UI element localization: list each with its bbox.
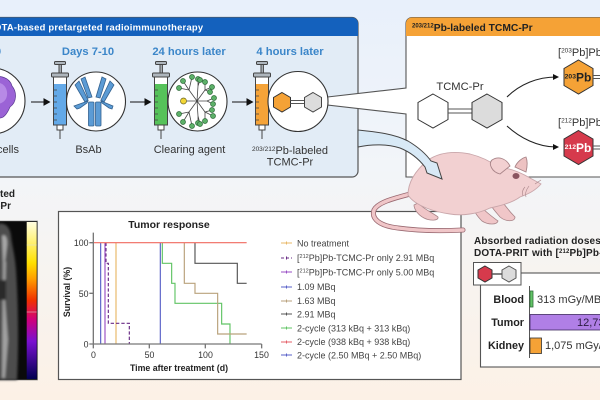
arrow: to lead-203 xyxy=(507,77,556,97)
panel: PET imaging title: ted xyxy=(0,189,15,200)
panel header: workflow title xyxy=(0,18,358,36)
icon: 203Pb hexagon: 203 xyxy=(565,74,576,80)
icon: 203Pb hexagon xyxy=(564,60,600,94)
icon: 203Pb hexagon: Pb xyxy=(576,70,591,84)
step label: days 7-10: Days 7-10 xyxy=(62,46,114,58)
chart legend: 1.63 MBq xyxy=(297,296,336,306)
chart legend: [ xyxy=(297,268,300,278)
chart axes xyxy=(89,233,262,348)
mouse body xyxy=(408,152,541,215)
arrow: step 3 to 4 xyxy=(232,99,252,105)
x axis tick labels: 100 xyxy=(198,350,213,360)
x axis tick labels: 50 xyxy=(145,350,154,360)
x axis tick labels: 0 xyxy=(91,350,96,360)
arrow: step 1 to 2 xyxy=(31,99,50,105)
icon: clearing agent dendrimer circle xyxy=(168,72,227,131)
chart legend: 2-cycle (2.50 MBq + 2.50 MBq) xyxy=(297,350,421,360)
illustration: mouse with injection arrow xyxy=(358,130,541,231)
y axis tick labels: 0 xyxy=(84,340,89,350)
y axis tick labels: 100 xyxy=(74,238,89,248)
y axis tick labels: 50 xyxy=(79,289,89,299)
chart legend: 212 xyxy=(300,268,309,274)
chart legend: 2.91 MBq xyxy=(297,310,336,320)
arrow: step 2 to 3 xyxy=(130,99,150,105)
chart legend: 212 xyxy=(300,254,309,260)
icon: blue syringe xyxy=(52,62,68,139)
step label: 4 hours later: 4 hours later xyxy=(256,46,324,58)
icon: tumor cell circle xyxy=(0,68,25,134)
bar row: tumor: Tumor xyxy=(491,317,525,329)
injection arrow xyxy=(358,130,442,179)
chart legend: Pb]Pb-TCMC-Pr only 5.00 MBq xyxy=(309,268,434,278)
icon: green syringe xyxy=(152,62,170,139)
mouse tail xyxy=(373,193,463,231)
icon: 212Pb hexagon: 212 xyxy=(565,144,576,151)
chart legend: Pb]Pb-TCMC-Pr only 2.91 MBq xyxy=(309,253,434,263)
bar row: kidney: Kidney xyxy=(488,340,524,352)
icon: orange syringe xyxy=(254,62,270,139)
panel: radiolabeled TCMC-Pr detail xyxy=(268,18,600,177)
label: 203Pb compound: 203 xyxy=(561,48,572,54)
chart legend: No treatment xyxy=(297,238,350,248)
mouse eye xyxy=(512,173,520,179)
survival curves xyxy=(93,243,247,344)
icon: 212Pb hexagon: Pb xyxy=(576,141,591,155)
panel: tumor response survival chart xyxy=(58,212,461,380)
label: 212Pb compound: [ xyxy=(558,117,561,129)
step label: 24 hours later: 24 hours later xyxy=(152,46,226,58)
zoom circle: radiolabeled ligand xyxy=(268,72,328,132)
text: TCMC-Pr label: TCMC-Pr xyxy=(436,81,484,93)
icon: ligand inset xyxy=(474,262,521,285)
panel header: TCMC-Pr title: Pb-labeled TCMC-Pr xyxy=(434,23,533,34)
panel: pretargeted radioimmunotherapy workflow xyxy=(0,18,358,177)
label: 203Pb compound: [ xyxy=(558,47,561,59)
step caption: clearing agent: Clearing agent xyxy=(154,144,225,156)
mouse feet xyxy=(414,198,515,224)
mouse ears xyxy=(490,157,527,174)
icon: 212Pb hexagon xyxy=(564,130,600,164)
molecule: unlabeled TCMC-Pr xyxy=(418,94,502,128)
arrow head: to lead-212 xyxy=(553,144,559,150)
label: 212Pb compound: 212 xyxy=(561,118,572,124)
chart legend: 2-cycle (313 kBq + 313 kBq) xyxy=(297,324,410,334)
bar row: blood xyxy=(493,291,600,307)
x axis title: Time after treatment (d) xyxy=(130,363,228,373)
arrow head: to lead-203 xyxy=(553,74,559,80)
heading: absorbed radiation doses: 212 xyxy=(559,249,570,255)
x axis tick labels xyxy=(91,350,269,360)
x axis tick labels: 150 xyxy=(254,350,269,360)
step caption: BsAb: BsAb xyxy=(75,144,102,156)
mouse whiskers xyxy=(522,180,541,197)
bar row: tumor xyxy=(491,314,600,330)
y axis tick labels xyxy=(74,238,89,350)
y axis title: Survival (%) xyxy=(62,267,72,317)
icon: bispecific antibody circle xyxy=(66,72,126,131)
bar row: blood: Blood xyxy=(493,294,524,306)
chart title: Tumor response xyxy=(128,219,210,231)
chart legend: [ xyxy=(297,253,300,263)
panel header: TCMC-Pr title: 203/212 xyxy=(412,24,434,30)
step caption: radiolabeled TCMC-Pr: Pb-labeled xyxy=(275,145,328,157)
chart legend xyxy=(281,238,434,360)
arrow: to lead-212 xyxy=(507,126,556,147)
chart legend: 1.09 MBq xyxy=(297,282,336,292)
chart legend: 2-cycle (938 kBq + 938 kBq) xyxy=(297,337,410,347)
image: SPECT/CT scan with color scale xyxy=(0,221,38,380)
panel header: TCMC-Pr title xyxy=(406,18,600,36)
bar row: kidney xyxy=(488,338,600,354)
heading: absorbed radiation doses: DOTA-PRIT with [ xyxy=(474,248,559,259)
step caption: radiolabeled TCMC-Pr: 203/212 xyxy=(252,146,276,153)
step caption: radiolabeled TCMC-Pr: TCMC-Pr xyxy=(267,156,314,168)
panel: absorbed dose bar chart xyxy=(474,262,600,367)
